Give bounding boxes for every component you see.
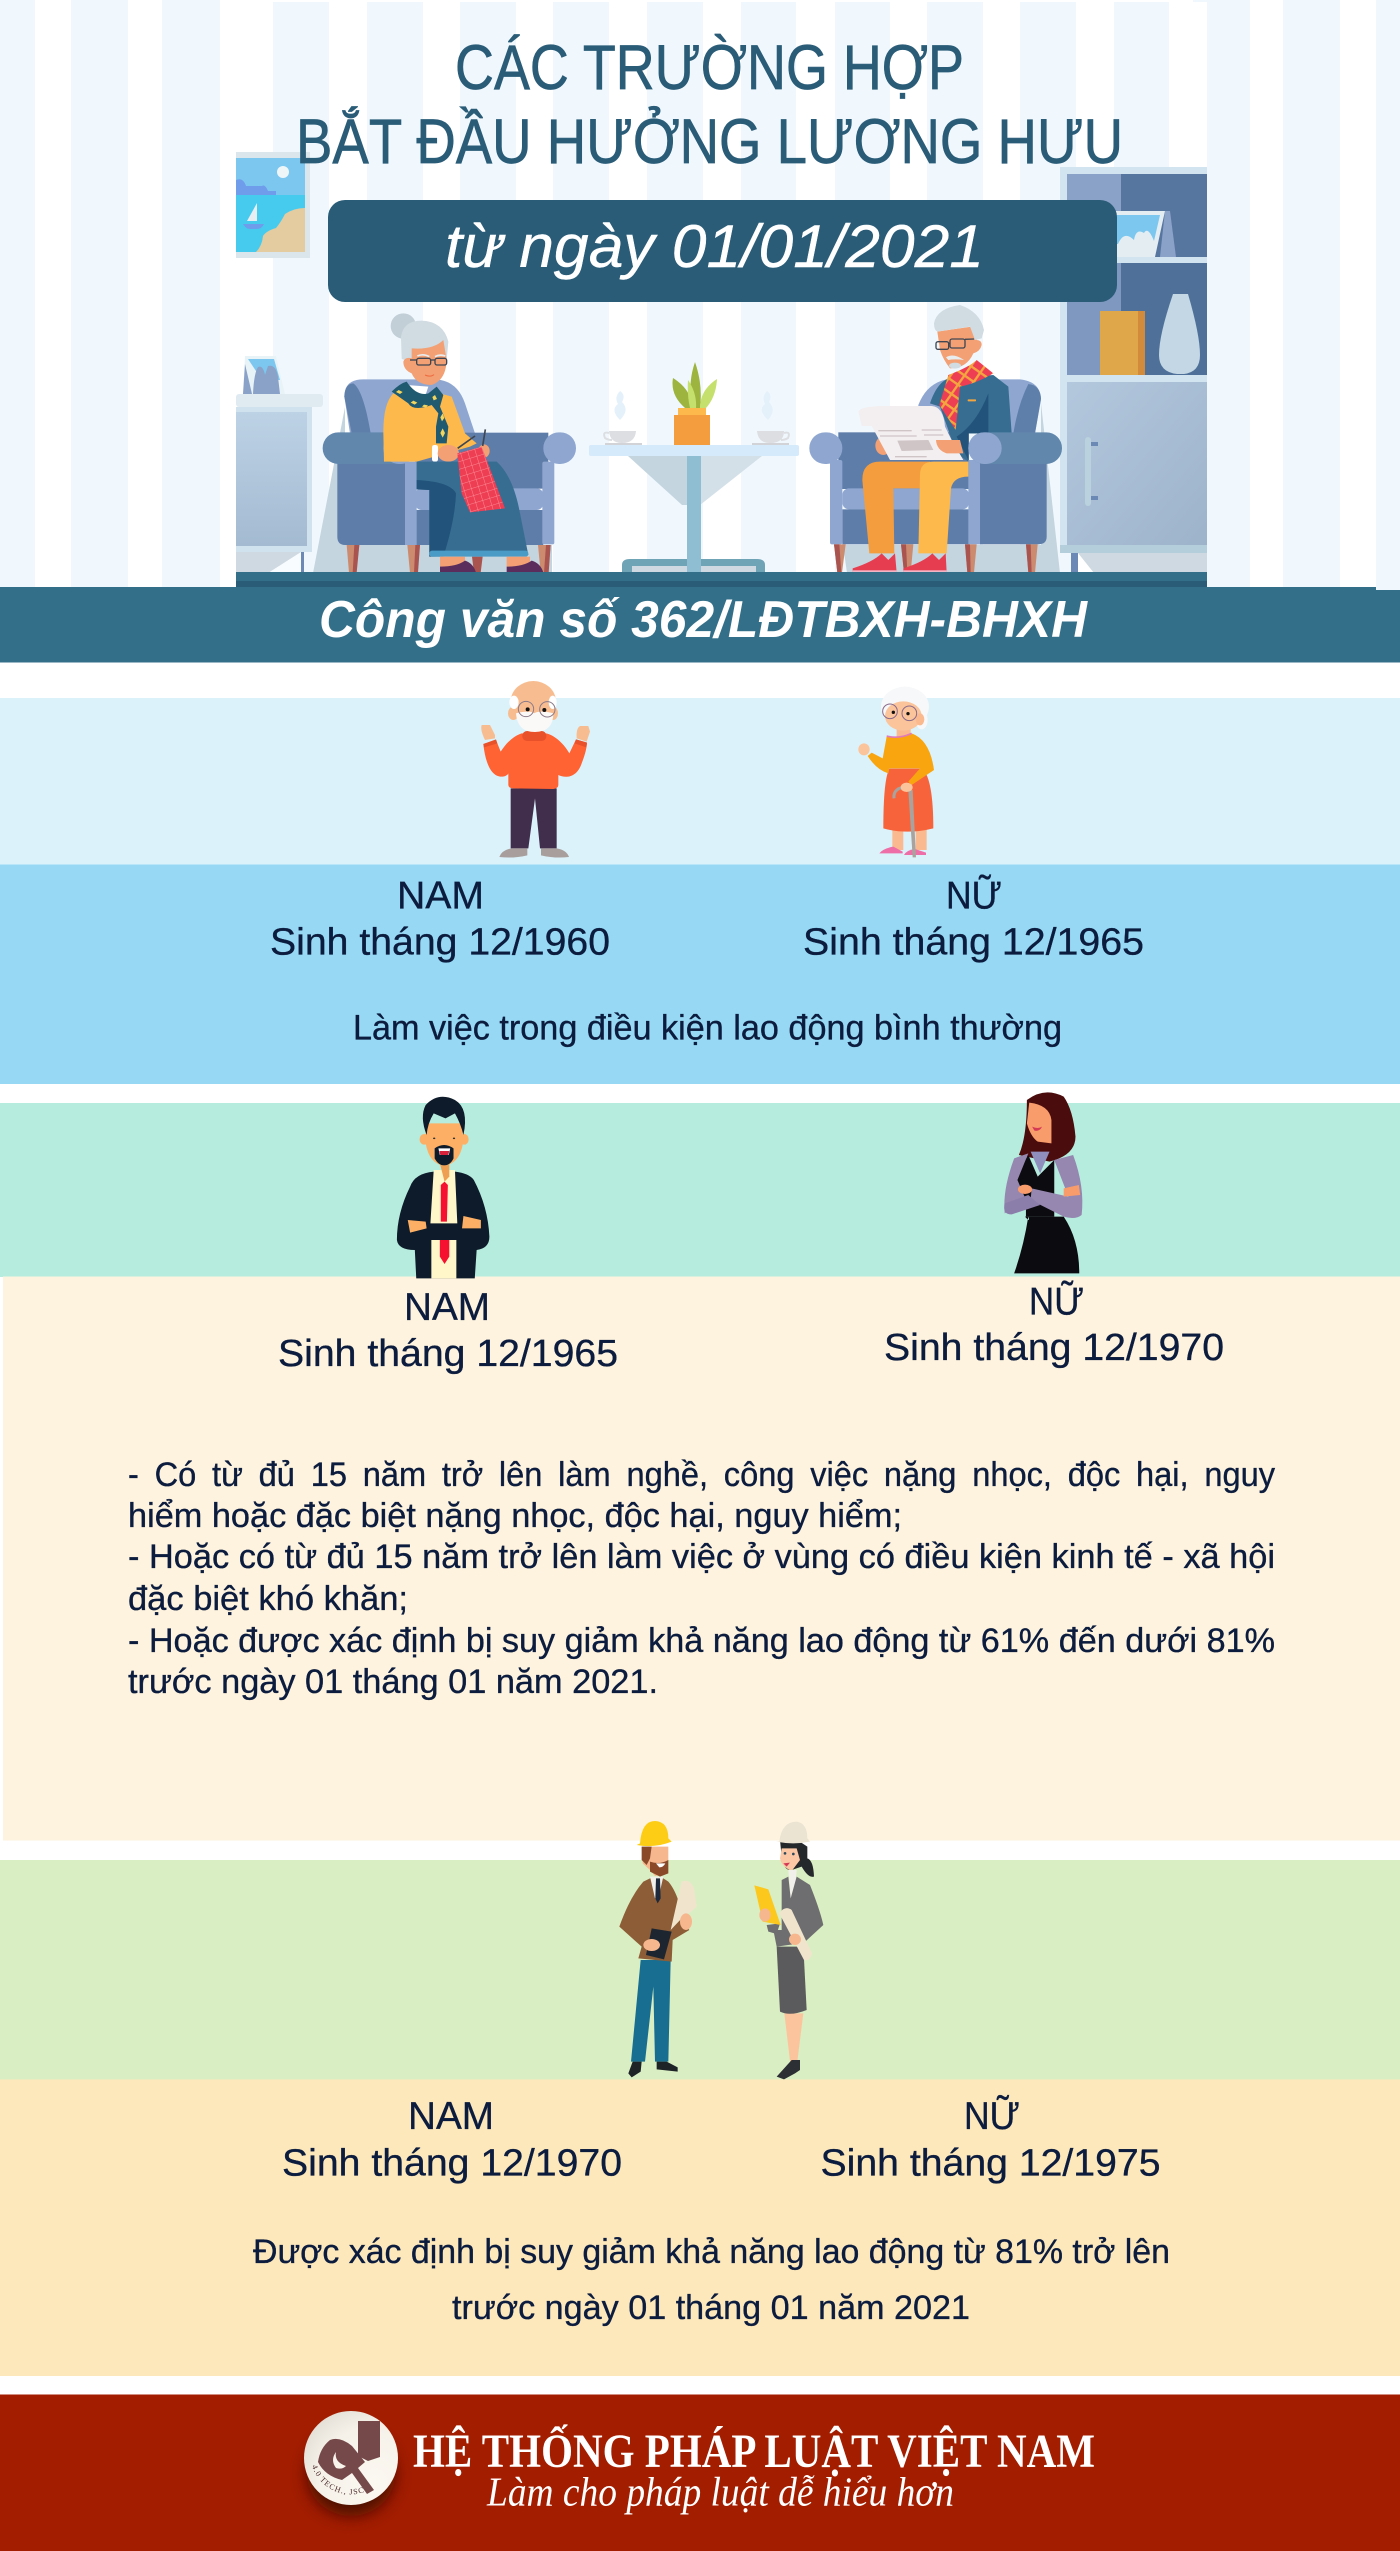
bookcase — [1060, 167, 1207, 573]
label: nu: NỮ — [946, 874, 1002, 918]
date banner — [328, 200, 1117, 302]
condition list: trước ngày 01 tháng 01 năm 2021. — [128, 1663, 658, 1701]
label: nam — [278, 1286, 618, 1375]
figure: old woman — [858, 687, 934, 857]
title: BẮT ĐẦU HƯỞNG LƯƠNG HƯU — [296, 106, 1123, 177]
floor — [236, 572, 1207, 589]
section 3: severe capacity loss — [0, 1821, 1400, 2376]
figure: old man — [481, 681, 590, 858]
lamp shadows behind chairs — [313, 403, 1060, 573]
book box — [1100, 311, 1145, 375]
label: nam: NAM — [404, 1286, 490, 1329]
hero background stripes — [0, 0, 1400, 590]
footer: Làm cho pháp luật dễ hiểu hơn — [486, 2468, 954, 2514]
logo — [298, 2411, 404, 2526]
title: CÁC TRƯỜNG HỢP — [455, 33, 964, 103]
condition list: - Có từ đủ 15 năm trở lên làm nghề, công việc nặng nhọc, độc hại, nguy — [128, 1456, 1275, 1494]
cabinet with photo frame — [236, 356, 323, 573]
document number band — [0, 587, 1400, 662]
label: nu — [803, 874, 1144, 964]
footer: HỆ THỐNG PHÁP LUẬT VIỆT NAM — [413, 2423, 1095, 2478]
label: nam: NAM — [408, 2095, 494, 2138]
figure: businesswoman — [1004, 1092, 1082, 1273]
room scene illustration — [236, 152, 1207, 589]
table legs — [622, 450, 765, 573]
condition text: Làm việc trong điều kiện lao động bình thường — [353, 1008, 1062, 1048]
grandfather reading newspaper — [853, 305, 1012, 573]
grandmother knitting — [383, 313, 543, 573]
date banner: từ ngày 01/01/2021 — [445, 213, 984, 280]
tea table with plant and cups — [589, 362, 799, 573]
label: nu: NỮ — [1029, 1280, 1084, 1324]
document number band: Công văn số 362/LĐTBXH-BHXH — [319, 591, 1088, 649]
cup right — [752, 391, 789, 445]
condition list — [128, 1456, 1275, 1701]
door handle — [1085, 437, 1098, 506]
left armchair and grandmother — [323, 313, 576, 573]
label: nam — [270, 874, 610, 964]
condition text — [253, 2233, 1170, 2327]
vase — [1159, 294, 1200, 374]
condition list: - Hoặc có từ đủ 15 năm trở lên làm việc ở vùng có điều kiện kinh tế - xã hội — [128, 1538, 1275, 1576]
condition text: trước ngày 01 tháng 01 năm 2021 — [452, 2289, 970, 2327]
label: nam: Sinh tháng 12/1970 — [282, 2142, 622, 2184]
title — [296, 33, 1123, 177]
condition list: hiểm hoặc đặc biệt nặng nhọc, độc hại, nguy hiểm; — [128, 1497, 902, 1535]
armrests — [809, 432, 1062, 464]
label: nu: NỮ — [964, 2094, 1020, 2138]
label: nu: Sinh tháng 12/1965 — [803, 922, 1144, 964]
logo: 4.0 TECH., JSC — [312, 2466, 364, 2495]
condition text: Được xác định bị suy giảm khả năng lao động từ 81% trở lên — [253, 2233, 1170, 2271]
label: nam: Sinh tháng 12/1965 — [278, 1333, 618, 1375]
label: nu — [884, 1280, 1224, 1369]
plant — [672, 362, 717, 445]
section 1: normal conditions — [0, 681, 1400, 1084]
label: nu: Sinh tháng 12/1975 — [820, 2142, 1160, 2184]
armchair right — [830, 379, 1047, 573]
figure: female engineer — [754, 1822, 823, 2079]
label: nam: NAM — [397, 874, 484, 918]
label: nu: Sinh tháng 12/1970 — [884, 1327, 1224, 1369]
label: nam: Sinh tháng 12/1960 — [270, 922, 610, 964]
cup left — [604, 391, 642, 445]
picture on shelf — [1100, 211, 1176, 257]
label: nu — [820, 2094, 1160, 2184]
footer — [0, 2394, 1400, 2551]
condition list: - Hoặc được xác định bị suy giảm khả năng lao động từ 61% đến dưới 81% — [128, 1622, 1275, 1660]
wall picture: beach — [236, 152, 310, 258]
figure: businessman — [397, 1097, 489, 1278]
section 2: heavy or hazardous work — [0, 1092, 1400, 1840]
right armchair and grandfather — [809, 305, 1062, 573]
label: nam — [282, 2095, 622, 2184]
armchair left — [323, 379, 576, 573]
figure: male engineer — [619, 1821, 697, 2077]
condition list: đặc biệt khó khăn; — [128, 1580, 408, 1618]
